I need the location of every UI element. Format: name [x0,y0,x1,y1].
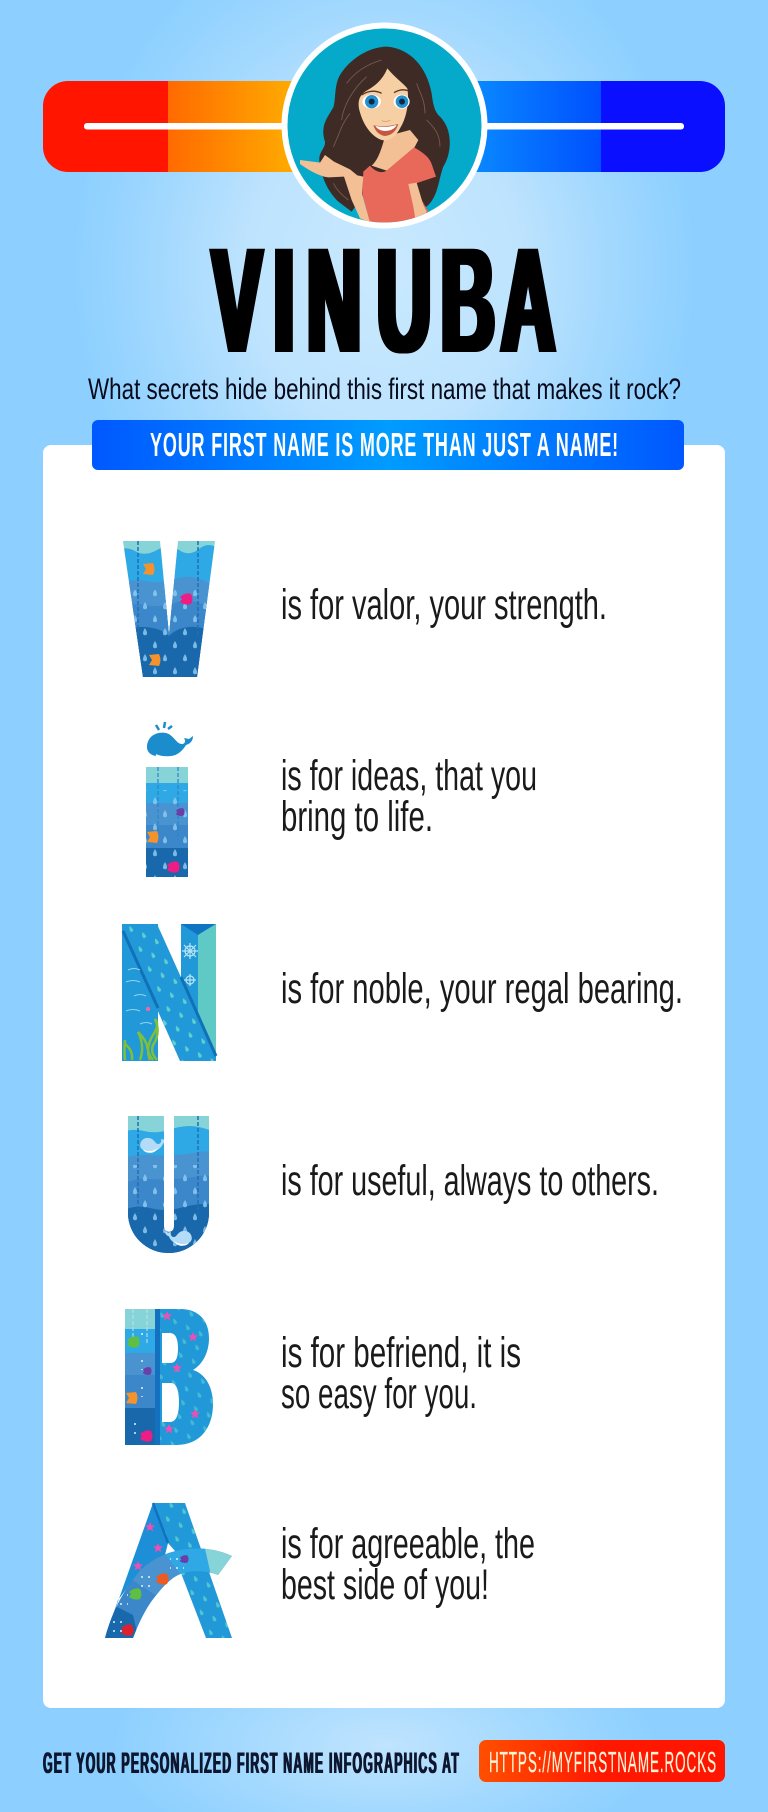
eyes [362,95,410,109]
left arm and hand [300,155,370,223]
nose and mouth [382,120,391,122]
row 2: letter i [146,722,537,877]
icon: letter I [146,767,188,877]
text: A: best side of you! [281,1561,489,1609]
avatar portrait [284,26,484,233]
icon: whale [147,722,193,758]
text: A: is for agreeable, the [281,1520,535,1568]
icon: letter U [128,1116,209,1253]
white content panel [43,445,725,1708]
text: B: so easy for you. [281,1370,477,1418]
text: B: is for befriend, it is [281,1329,521,1377]
footer url button [479,1740,725,1782]
icon: letter A [105,1502,232,1638]
icon: letter B [125,1309,217,1445]
shirt [362,148,436,222]
text: V: is for valor, your strength. [281,581,607,629]
text: I: bring to life. [281,793,433,841]
text: I: is for ideas, that you [281,752,537,800]
neck [372,130,418,171]
title: VINUBA [212,218,555,385]
hair [319,47,450,212]
text: I [281,752,537,841]
text: A [281,1520,535,1609]
banner [92,420,684,470]
row 6: letter A [100,1503,535,1645]
face [359,68,408,140]
row 5: letter B [125,1309,521,1445]
icon: letter V [123,541,215,677]
right arm [408,182,427,218]
row 1: letter V [115,538,607,682]
header ribbon bar [43,81,725,172]
row 3: letter N [122,924,683,1061]
text: B [281,1329,521,1418]
row 4: letter U [120,1114,659,1260]
icon: letter N [122,924,216,1061]
eyebrows [362,90,408,95]
